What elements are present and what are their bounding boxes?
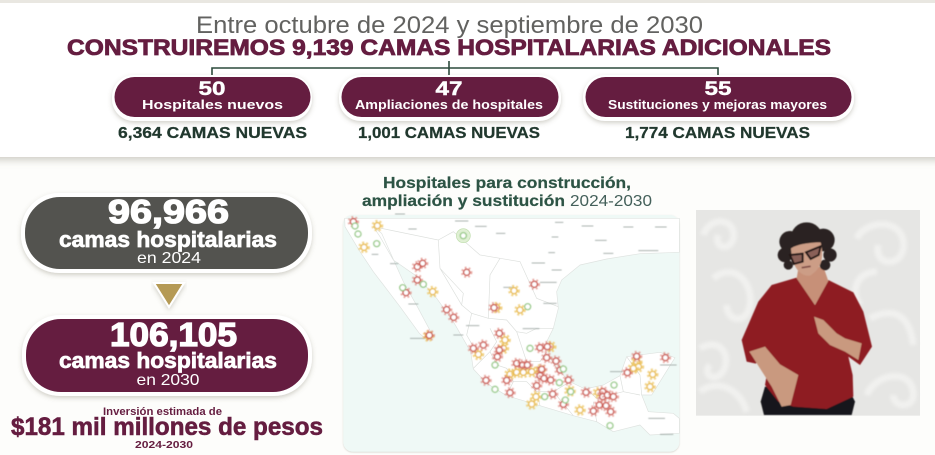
pill: hospitales nuevos: 50	[198, 79, 226, 100]
pill: hospitales nuevos	[112, 75, 312, 121]
black trousers	[761, 387, 855, 415]
pill: camas en 2030: en 2030	[136, 372, 200, 389]
arrow: down triangle	[154, 283, 184, 307]
title: CONSTRUIREMOS 9,139 CAMAS HOSPITALARIAS ADICIONALES	[67, 35, 831, 60]
state borders	[373, 227, 642, 422]
map heading: 2024-2030	[570, 193, 652, 210]
pill: sustituciones: Sustituciones y mejoras mayores	[608, 97, 827, 112]
raised hand	[814, 317, 862, 360]
pill: camas en 2030	[22, 315, 312, 396]
text: inversion estimada: $181 mil millones de pesos	[11, 413, 323, 441]
pill: ampliaciones: Ampliaciones de hospitales	[355, 97, 543, 112]
hair	[778, 222, 837, 270]
text: inversion estimada: 2024-2030	[135, 440, 194, 451]
label: camas nuevas 3: 1,774 CAMAS NUEVAS	[625, 125, 810, 142]
markers: yellow	[359, 221, 657, 415]
markers: red	[349, 217, 670, 416]
pill: camas en 2030: 106,105	[110, 316, 237, 353]
map heading	[362, 175, 652, 210]
markers: green	[352, 223, 617, 429]
pill: camas en 2030: camas hospitalarias	[59, 348, 277, 373]
mouth	[802, 266, 811, 268]
pill: camas en 2024	[21, 193, 312, 273]
text: inversion estimada	[11, 406, 323, 451]
pill: ampliaciones	[339, 75, 561, 121]
face	[791, 242, 822, 276]
panel: sign language interpreter	[696, 210, 920, 416]
panel: map of Mexico	[343, 214, 679, 452]
connector lines	[212, 61, 718, 75]
hospital markers	[349, 217, 670, 429]
large green region marker	[456, 229, 470, 243]
pill: camas en 2024: en 2024	[137, 250, 201, 267]
interpreter figure	[742, 222, 872, 415]
label: camas nuevas 1: 6,364 CAMAS NUEVAS	[118, 125, 307, 142]
red blouse	[742, 278, 872, 409]
pill: sustituciones	[583, 75, 854, 121]
map heading: ampliación y sustitución	[362, 193, 565, 210]
land	[345, 218, 679, 435]
pill: sustituciones: 55	[704, 79, 732, 100]
pill: ampliaciones: 47	[436, 79, 462, 100]
neck	[797, 267, 828, 305]
background pattern	[700, 222, 913, 412]
lower arm and hand	[749, 347, 798, 407]
map labels	[372, 214, 677, 434]
label: camas nuevas 2: 1,001 CAMAS NUEVAS	[358, 125, 540, 142]
panel: top band	[0, 0, 935, 157]
pill: camas en 2024: 96,966	[108, 193, 229, 230]
pill: hospitales nuevos: Hospitales nuevos	[142, 97, 283, 112]
pill: camas en 2024: camas hospitalarias	[59, 227, 277, 252]
glasses	[790, 246, 821, 264]
subtitle: date range: Entre octubre de 2024 y septiembre de 2030	[196, 12, 703, 39]
map heading: Hospitales para construcción,	[383, 175, 631, 192]
text: inversion estimada: Inversión estimada de	[103, 406, 222, 418]
